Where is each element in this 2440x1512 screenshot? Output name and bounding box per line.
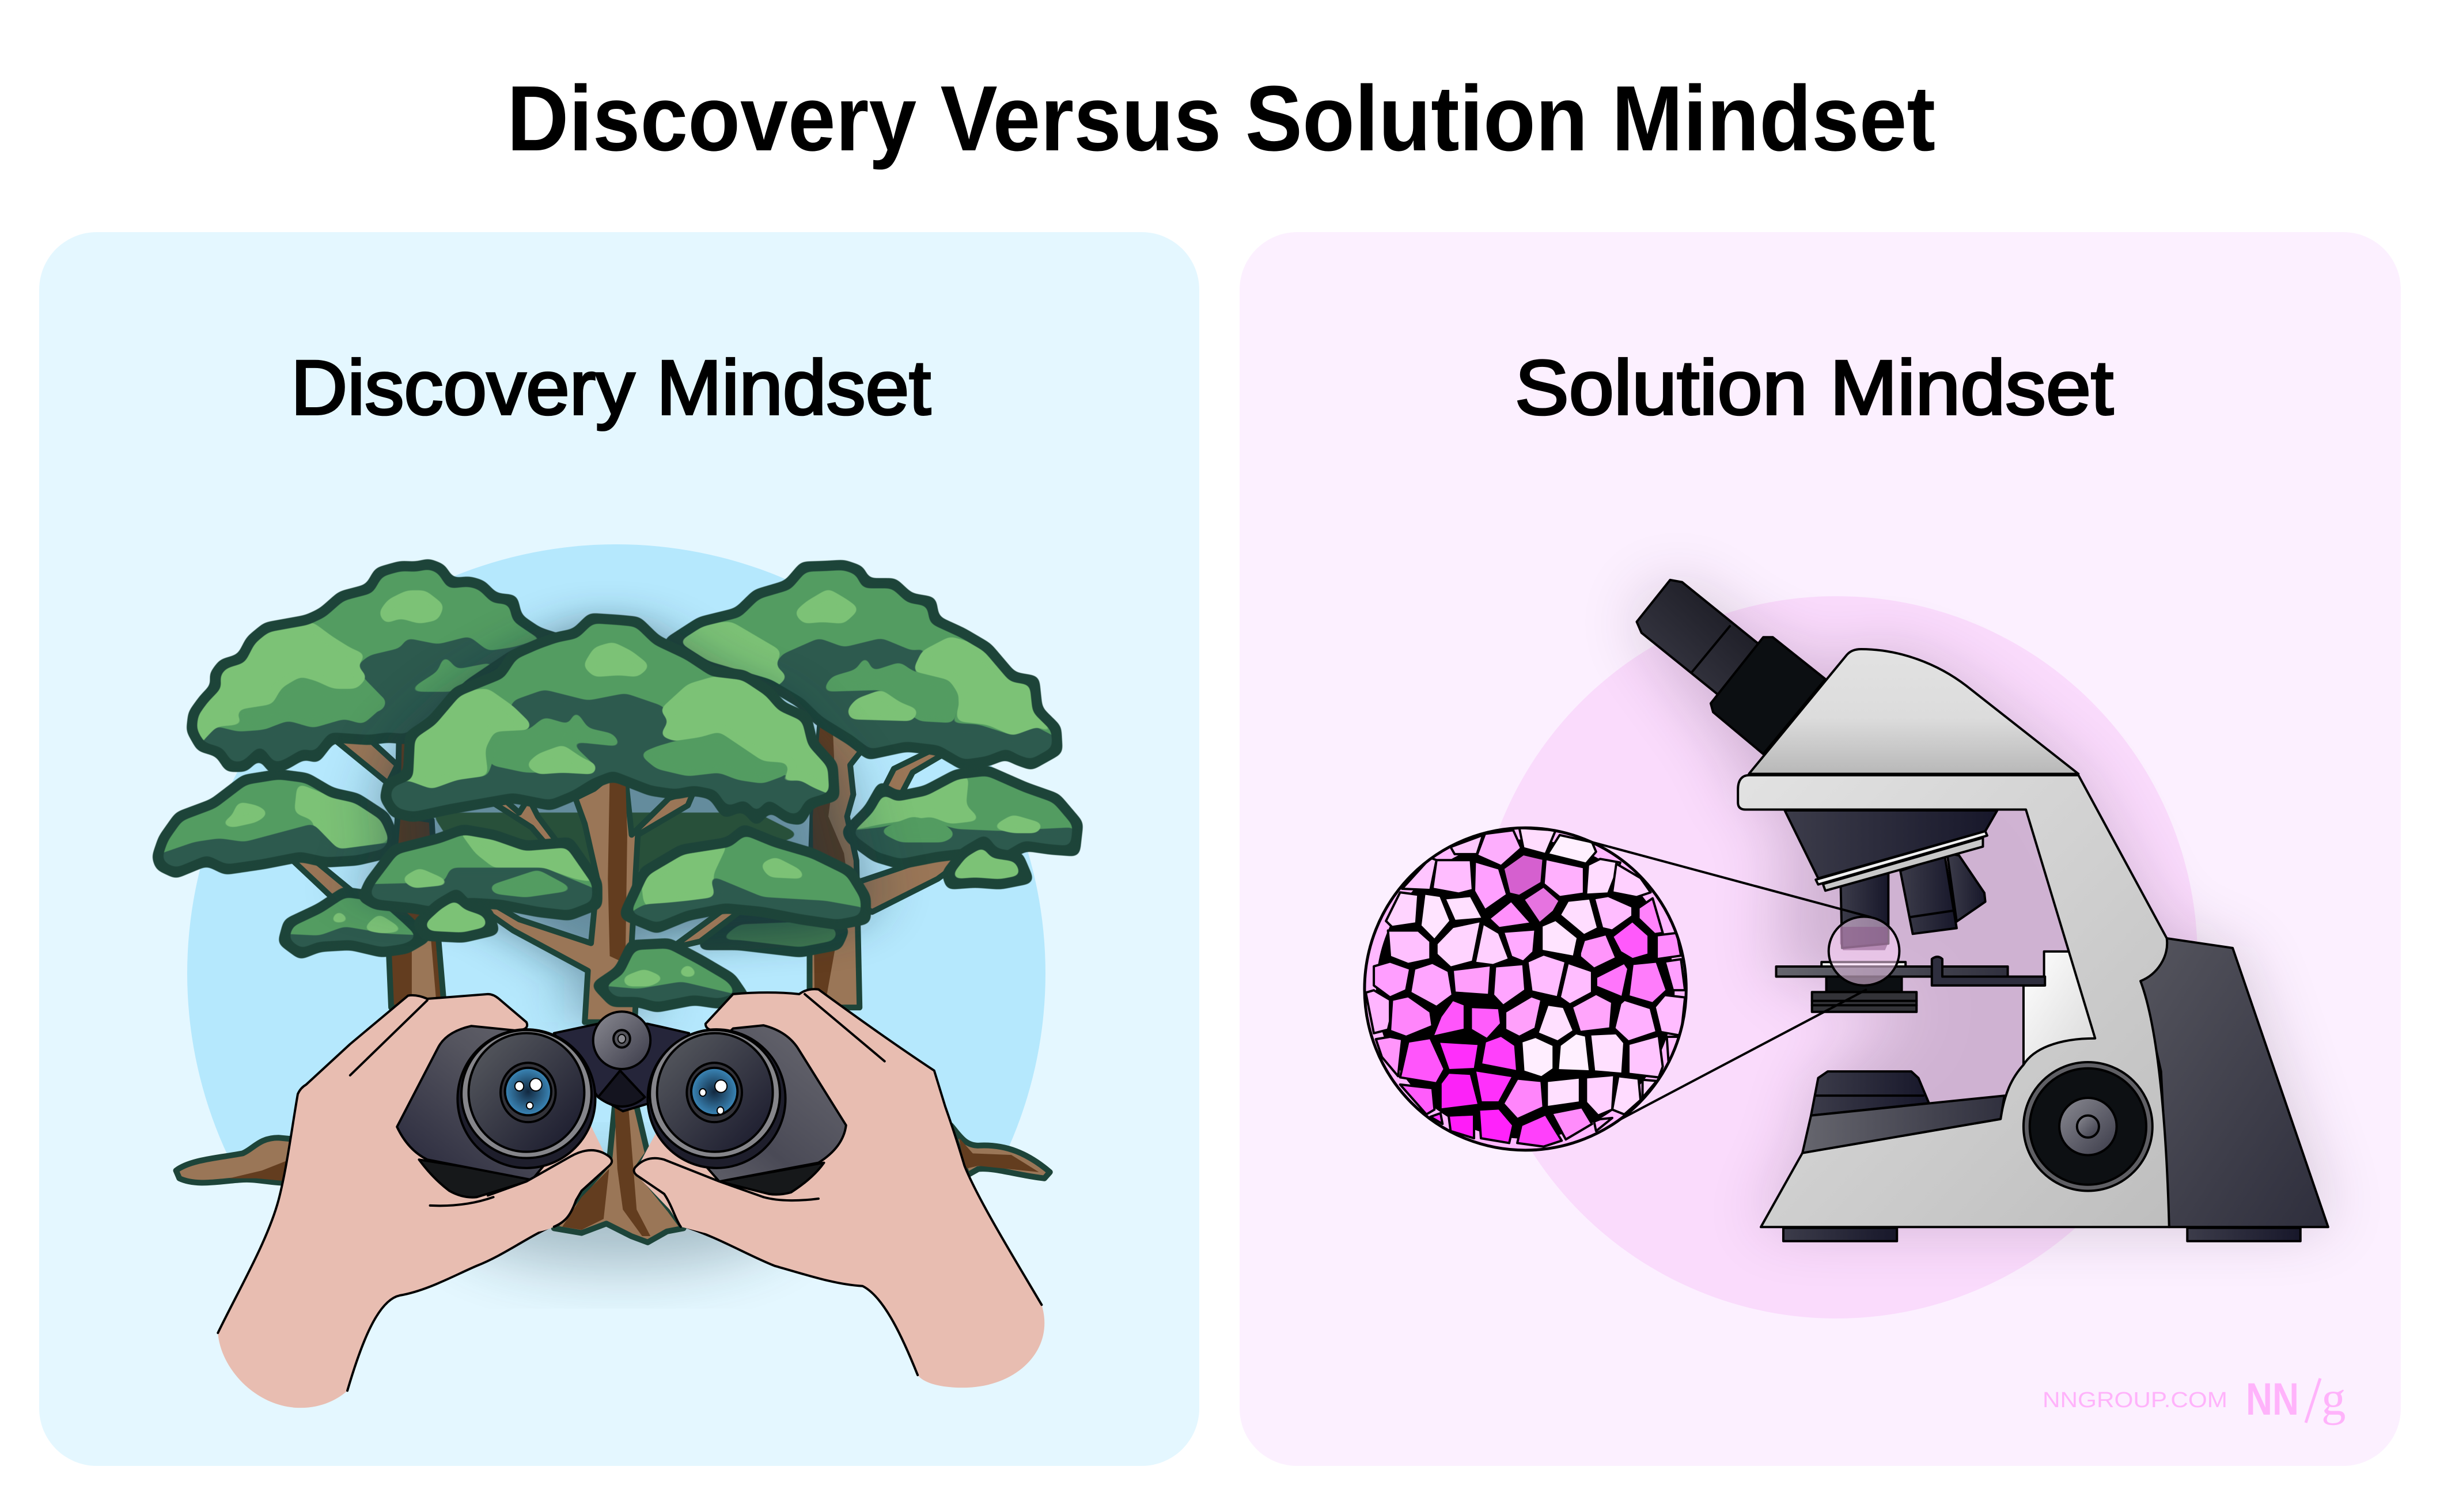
heading: solution mindset: Solution Mindset	[1515, 345, 2113, 431]
backdrop: pink circle	[1475, 596, 2197, 1318]
left tree trunk and branches	[285, 721, 444, 1007]
right back canopy	[669, 565, 1075, 787]
illustration: microscope	[1592, 580, 2328, 1241]
logo: nngroup	[2043, 1371, 2346, 1426]
lower right canopy	[626, 829, 869, 934]
backdrop: blue circle	[187, 544, 1045, 1154]
back body	[2140, 938, 2328, 1227]
dark interior behind branches	[432, 813, 800, 919]
heading: discovery mindset: Discovery Mindset	[291, 345, 931, 431]
illustration: trees	[157, 564, 1081, 1022]
panel: solution mindset	[1240, 232, 2401, 1466]
magnifying lens	[1829, 916, 1899, 986]
binoculars	[397, 1011, 846, 1198]
lower left canopy	[363, 828, 600, 919]
left body	[397, 1026, 593, 1180]
small right cluster	[947, 840, 1028, 884]
left hand	[218, 994, 609, 1408]
bridge	[554, 1024, 689, 1111]
central canopy	[382, 618, 838, 824]
illustration: hands and binoculars	[176, 989, 1050, 1408]
focus knob	[2024, 1062, 2153, 1191]
panel background: discovery	[39, 232, 1199, 1466]
right thumb	[634, 1158, 824, 1244]
right tree trunk and branches	[810, 721, 969, 1007]
title: Discovery Versus Solution Mindset	[507, 67, 1935, 170]
left back canopy	[176, 564, 563, 787]
right mid canopy	[838, 771, 1081, 871]
right eyecup	[647, 1029, 786, 1168]
eyepiece block	[1711, 637, 1825, 754]
logo: nngroup: g	[2321, 1371, 2346, 1426]
left eyecup	[457, 1029, 596, 1168]
central tree trunk and branches	[479, 776, 744, 1022]
panel: discovery mindset	[39, 232, 1199, 1466]
magnification lines	[1592, 842, 1871, 1121]
shadow below tree	[448, 1164, 793, 1267]
microscope shadow	[1636, 580, 2328, 1227]
left thumb	[427, 1150, 612, 1233]
white support	[2024, 952, 2097, 1065]
logo: nngroup: NNGROUP.COM	[2043, 1388, 2227, 1412]
cell grid	[1365, 828, 1686, 1150]
left low canopy	[276, 892, 432, 960]
right low canopy	[703, 916, 844, 952]
left mid canopy	[157, 774, 395, 879]
stage	[1776, 957, 2045, 1012]
shadow behind central tree	[363, 618, 866, 1022]
head	[1749, 649, 2078, 774]
tree roots	[176, 1106, 1050, 1242]
eyepiece	[1636, 580, 1759, 695]
logo: nngroup: NN	[2246, 1373, 2299, 1424]
magnified cell circle	[1365, 828, 1686, 1150]
objectives	[1840, 853, 1986, 948]
right hand	[636, 989, 1044, 1388]
panel background: solution	[1240, 232, 2401, 1466]
lamp base	[1802, 1071, 2005, 1153]
right body	[653, 1025, 846, 1181]
focus knob	[593, 1011, 650, 1069]
bottom center canopy	[597, 943, 744, 1011]
arm and base	[1738, 775, 2169, 1227]
feet	[1783, 1228, 2301, 1241]
small light canopy	[418, 893, 494, 938]
nosepiece	[1784, 810, 1997, 890]
lower barrels	[419, 1159, 537, 1198]
